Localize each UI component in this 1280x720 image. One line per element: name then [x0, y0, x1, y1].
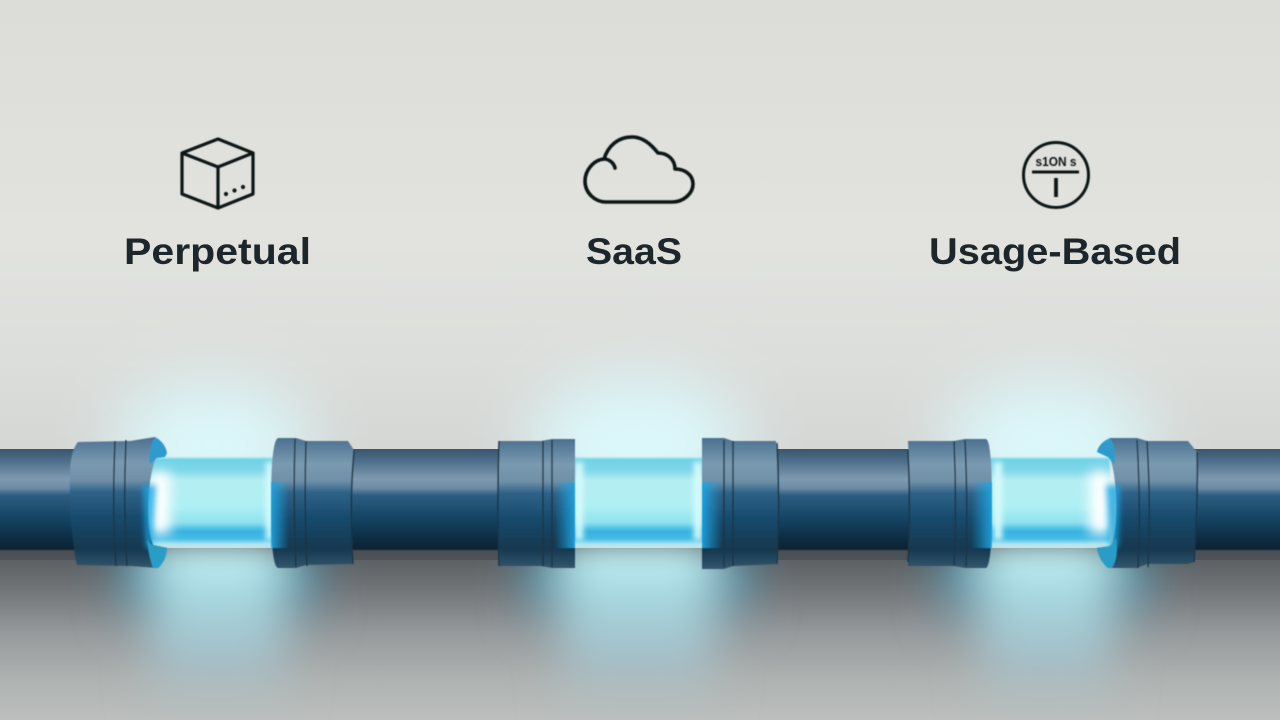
pipeline — [0, 437, 1280, 569]
glowing tube segments — [145, 458, 1110, 545]
icon: cloud — [585, 137, 693, 202]
collar 4 — [702, 438, 778, 569]
icon: box — [182, 139, 253, 208]
collar 2 — [271, 438, 354, 568]
dark pipe segments — [0, 449, 1280, 560]
collar 3 — [498, 439, 575, 568]
floor shadow — [0, 548, 1280, 720]
icon: meter dial: s1ON s — [1036, 154, 1076, 169]
collar 6 — [1097, 438, 1197, 568]
heading: SaaS: SaaS — [586, 231, 682, 272]
collar 5 — [908, 439, 992, 568]
heading: Perpetual: Perpetual — [124, 231, 311, 272]
glow above the pipe — [112, 377, 1153, 513]
heading: Usage-Based: Usage-Based — [929, 231, 1181, 272]
glow pools below the pipe — [120, 545, 1150, 720]
icon: meter dial — [1024, 142, 1088, 208]
collar 1 — [70, 437, 167, 568]
